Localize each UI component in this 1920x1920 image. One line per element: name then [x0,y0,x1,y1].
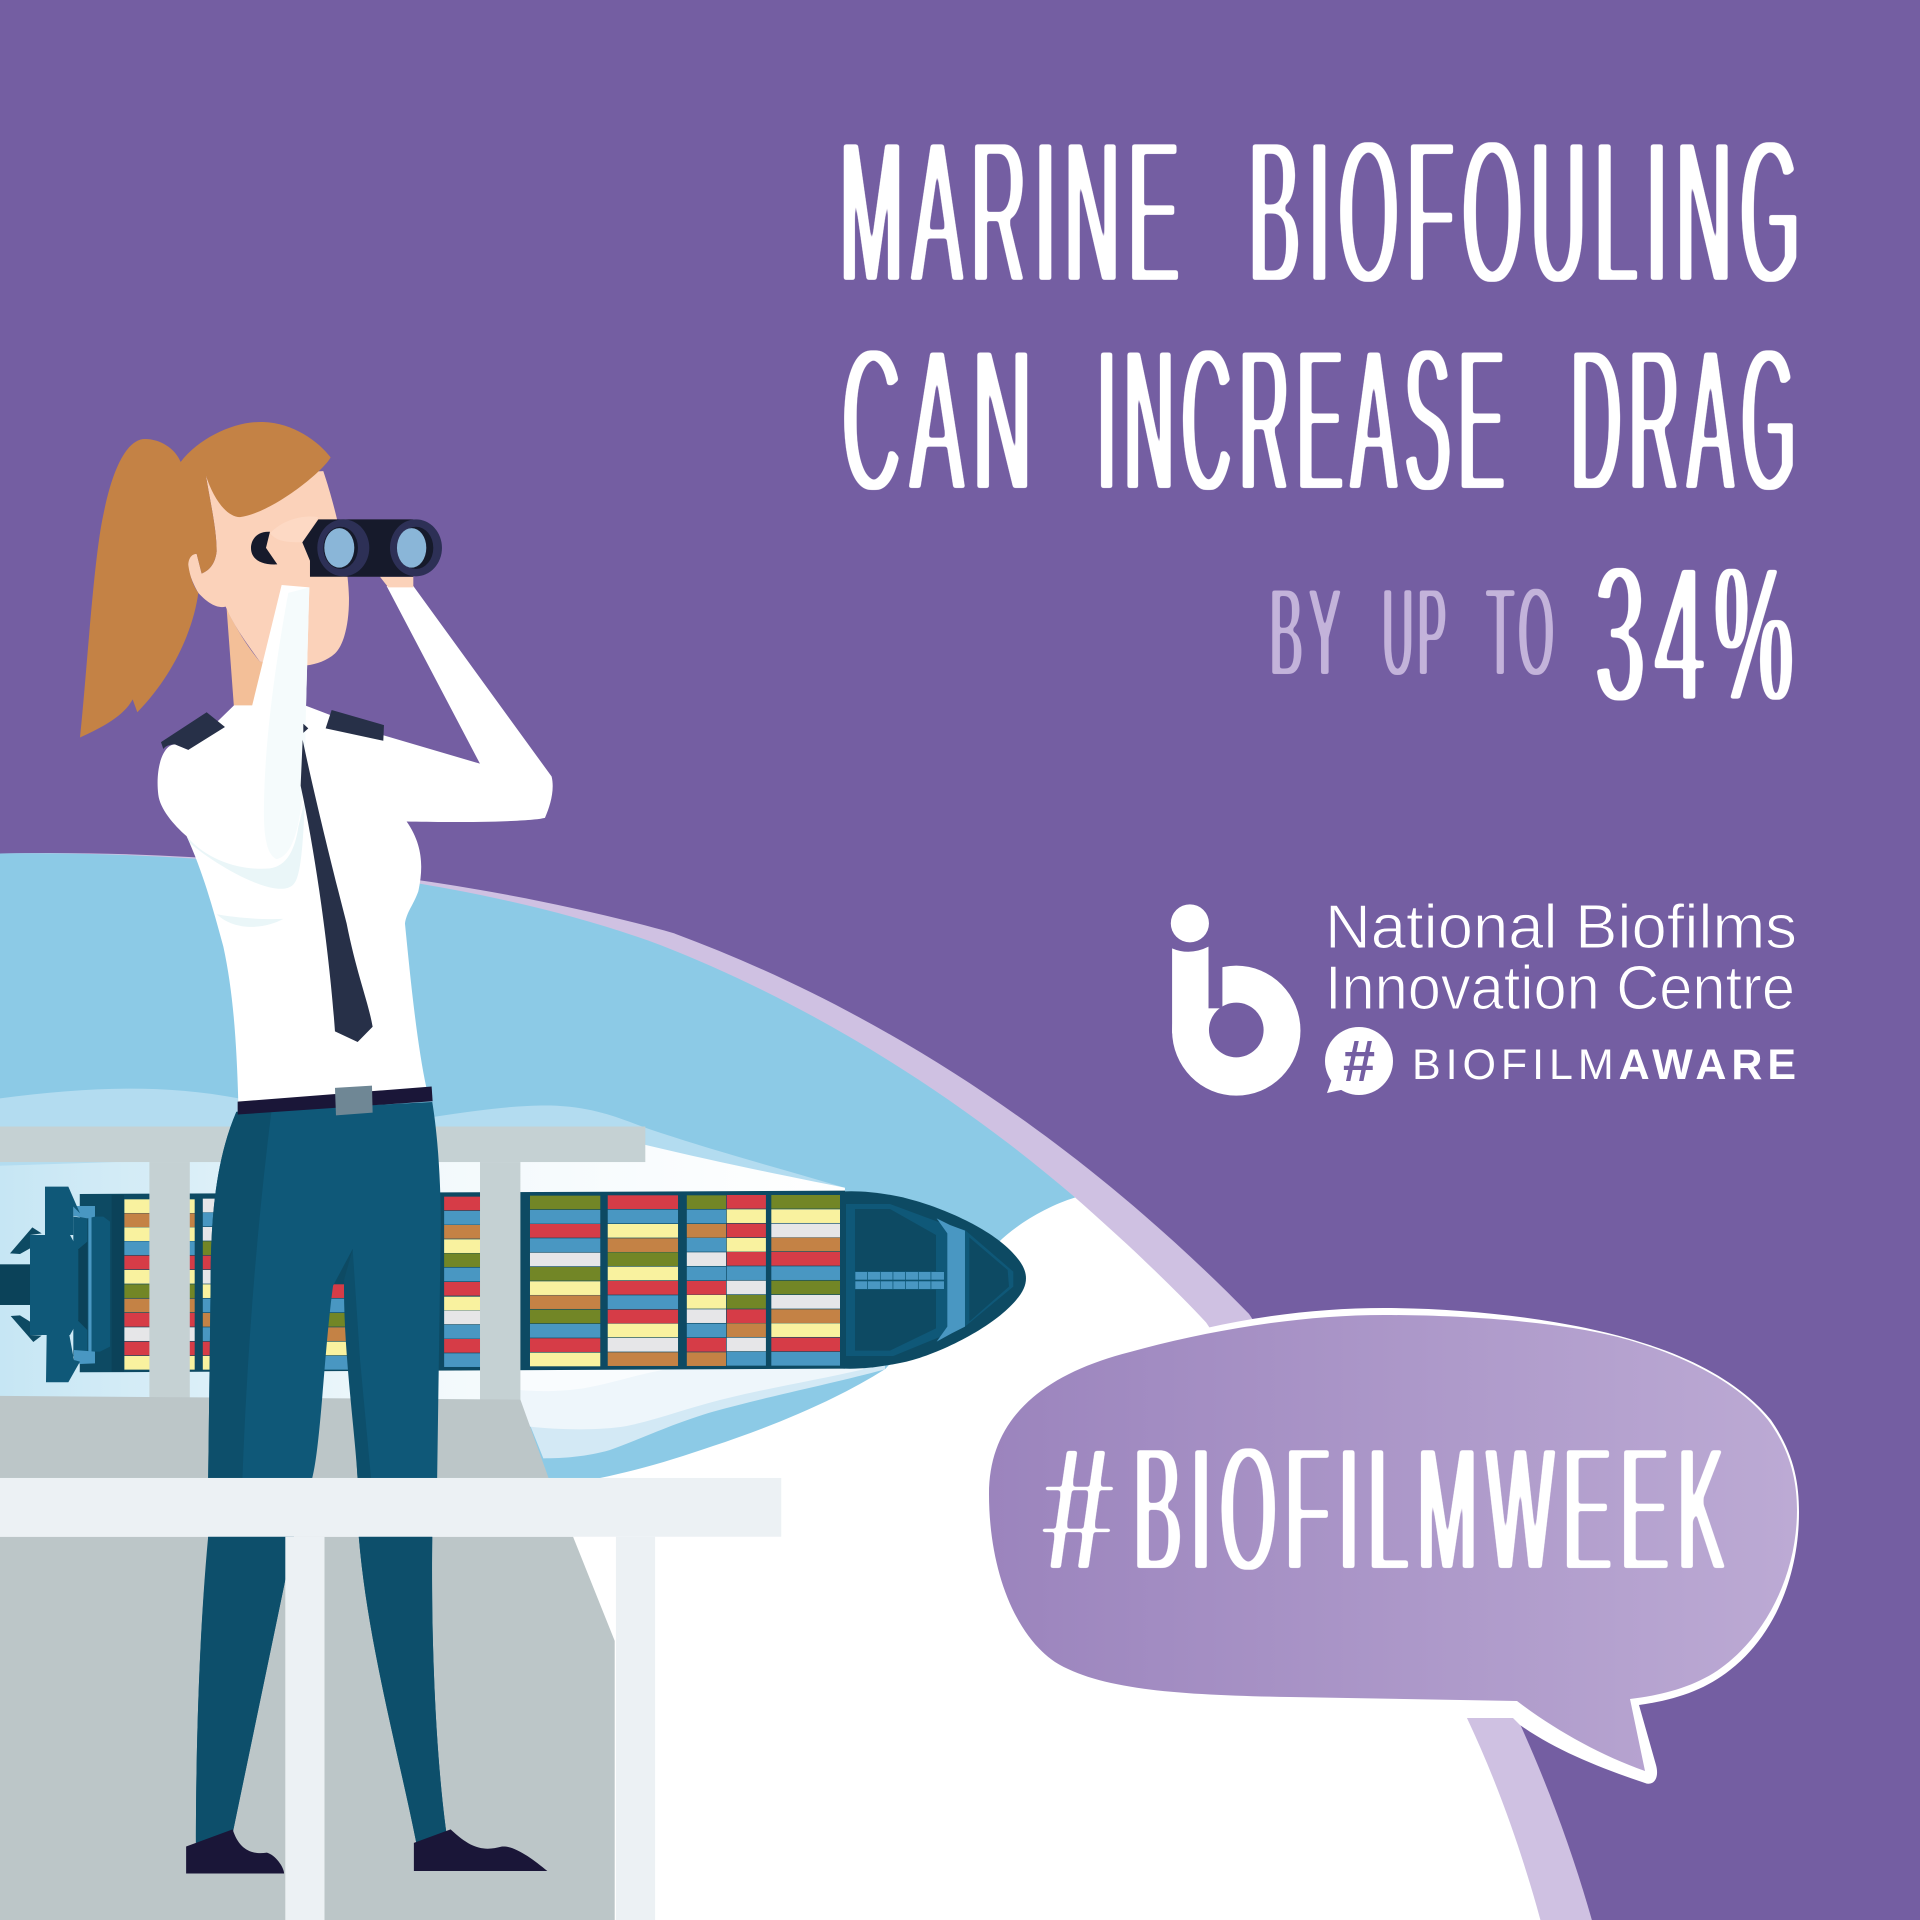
title line 3: by up to: BY [1270,561,1347,703]
logo mark [1171,904,1300,1096]
logo name: National Biofilms [1325,893,1797,962]
right epaulette [326,710,384,741]
title [840,97,1809,744]
lilac hull edge [0,853,1592,1920]
officer upper body with binoculars [80,422,553,1115]
shirt [158,586,553,1103]
forward hold [855,1209,936,1351]
wake middle band [520,1363,863,1429]
rail post right [480,1162,520,1401]
aft block [92,1217,110,1352]
blue water [0,853,1075,1478]
front post right [616,1537,655,1920]
hatch grid [855,1272,944,1289]
trouser shading [208,1108,272,1478]
officer trousers and shoes [186,1102,547,1873]
deck floor [0,1537,615,1920]
hashtag [1044,1409,1735,1610]
logo: National Biofilms Innovation Centre [1171,893,1797,1096]
bow deck band [846,1204,1013,1356]
container stacks [124,1195,842,1370]
bubble white outline [1130,1308,1799,1784]
belt buckle [335,1086,373,1115]
ship hull [80,1191,845,1372]
bubble body [989,1315,1797,1771]
wake inner band [520,1363,667,1391]
wake outer band [520,1363,885,1458]
title line 2: CAN [842,305,1041,535]
speech bubble [989,1308,1799,1784]
bow hull [840,1191,1026,1369]
face and ear [188,471,349,665]
front rail [0,1478,781,1920]
hashtag bubble icon [1325,1027,1393,1095]
white hull [0,1102,1540,1920]
lower fin [11,1315,42,1342]
right shoe [414,1829,547,1871]
lower fold [217,914,283,927]
forepeak [969,1237,1009,1322]
stern wake [520,1363,885,1458]
inner leg shading [344,1249,371,1478]
shirt fold [187,800,305,889]
front rail bar [0,1478,781,1537]
lower flange [46,1335,80,1382]
stern deck [73,1217,87,1357]
binoculars [251,517,442,577]
ship bow [840,1191,1026,1369]
tie [301,724,373,1042]
title line 3: by up to: UP [1382,561,1451,703]
upper rail [0,1127,645,1162]
propeller shaft [0,1264,32,1305]
rail post left [149,1162,190,1401]
upper fin [10,1227,42,1254]
front post left [285,1537,324,1920]
bottom cap [74,1350,95,1364]
ship stern and propeller [0,1187,124,1382]
left shoe [186,1829,284,1873]
title line 1: MARINE [840,97,1188,327]
title: TO [1487,561,1559,703]
trousers [196,1102,447,1843]
logo name: Innovation Centre [1325,954,1795,1023]
inner wake [0,1145,845,1408]
container ship [80,1191,845,1372]
hashtag bubble icon: # [1343,1029,1375,1094]
title line 2 [842,305,1804,535]
title line 3: by up to [1270,561,1559,703]
central hub [30,1235,78,1335]
ship deck and sea scene [0,853,1592,1920]
stern strip [88,1217,92,1352]
raised sleeve [252,585,309,708]
hashtag: # [1044,1409,1128,1610]
upper flange [45,1187,80,1235]
stern band [112,1195,124,1372]
logo name [1325,893,1797,1023]
left epaulette [161,712,225,750]
neck [227,609,280,708]
hair [80,422,331,738]
rudder shade [77,1242,87,1330]
bow strip [937,1218,965,1342]
lower leg shade [196,1537,447,1843]
sleeve shade [264,587,309,859]
right hand [380,577,413,587]
biofilmaware wordmark: BIOFILMAWARE [1412,1041,1796,1089]
lower deck [0,1396,549,1478]
outer wake [0,1089,845,1408]
bridge rail and lower deck [0,1127,645,1920]
belt [238,1087,433,1115]
top cap [73,1206,95,1218]
